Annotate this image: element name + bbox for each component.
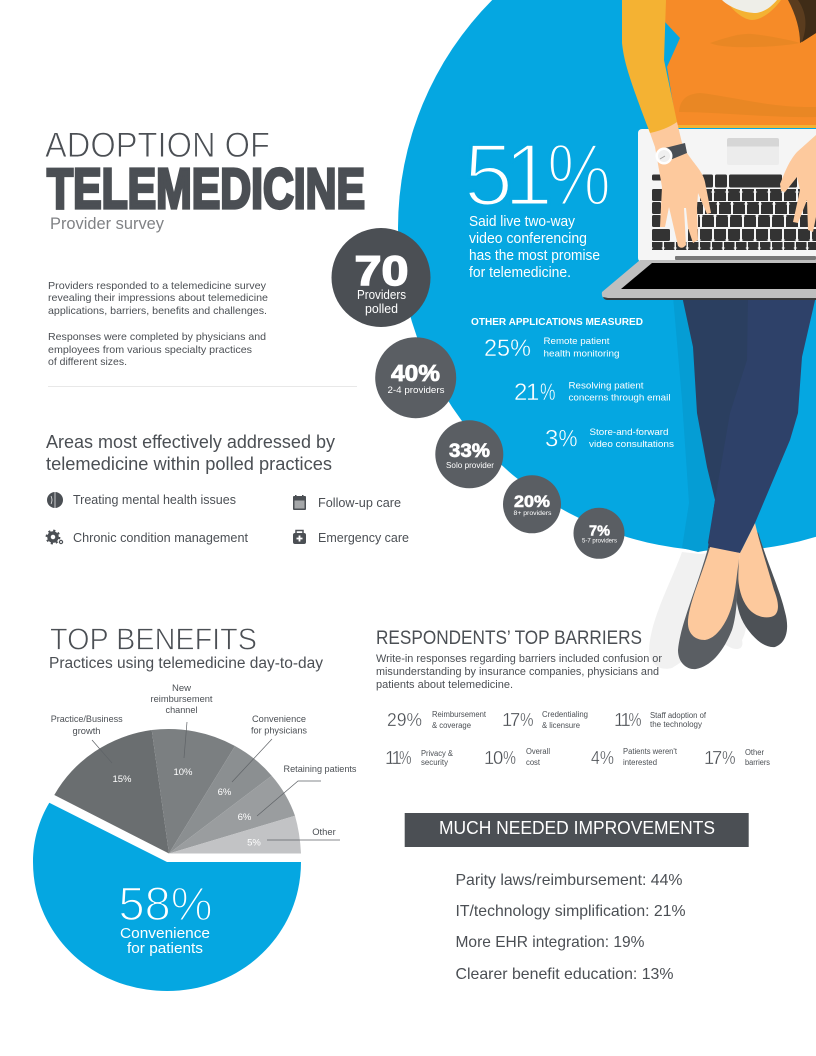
intro text: applications, barriers, benefits and challenges. [48, 305, 267, 317]
stat: 21% email: 21 [514, 379, 539, 406]
bubble: 20%: 20% [514, 493, 550, 511]
slice labels [51, 683, 357, 838]
heading: respondents' top barriers: patients about telemedicine. [376, 679, 513, 691]
slice: retaining patients 6% [169, 776, 295, 854]
right hand [780, 135, 816, 232]
slice labels: New [172, 683, 191, 694]
stat: 10% cost: cost [526, 758, 541, 767]
back foot and shoe [736, 523, 787, 647]
slice values: 15% [112, 774, 132, 785]
blue circle background [398, 0, 816, 551]
other applications measured [471, 317, 674, 452]
icon: brain [47, 492, 63, 508]
stat: 11% staff adoption: the technology [650, 720, 702, 729]
slice labels: reimbursement [150, 694, 213, 705]
stat: 21% email [514, 379, 670, 406]
bubble: 33% [435, 420, 503, 488]
stat: 11% privacy: Privacy & [421, 749, 454, 758]
callout: 51%: % [547, 125, 611, 224]
intro text: Responses were completed by physicians and [48, 331, 266, 343]
stat: 25% remote monitoring: 25% [484, 335, 531, 362]
stat: 21% email: Resolving patient [568, 380, 644, 392]
heading: respondents' top barriers: RESPONDENTS’ TOP BARRIERS [376, 628, 642, 649]
heading: areas addressed: Areas most effectively addressed by [46, 431, 336, 452]
laptop lid [602, 260, 816, 299]
stat: 25% remote monitoring [484, 335, 620, 362]
other applications measured: OTHER APPLICATIONS MEASURED [471, 317, 643, 328]
hair [788, 0, 816, 43]
bubble: 33%: Solo provider [446, 461, 494, 470]
callout: 51%: video conferencing [469, 231, 587, 247]
stat: 10% cost: Overall [526, 747, 550, 756]
bubble: 70 providers polled: polled [365, 302, 398, 316]
item: emergency care: Emergency care [318, 530, 409, 545]
intro text: of different sizes. [48, 356, 127, 368]
stat: 29% reimbursement [387, 709, 487, 730]
bubble: 40%: 40% [391, 360, 440, 386]
slice: practice growth 15% [54, 730, 169, 854]
back leg [682, 296, 760, 553]
stat: 17% other: % [722, 747, 736, 768]
barrier stats [385, 709, 770, 768]
stat: 11% staff adoption: 11 [614, 709, 631, 730]
improvements list: More EHR integration: 19% [456, 934, 644, 951]
banner: much needed improvements [405, 813, 749, 847]
slice values: 6% [238, 812, 252, 823]
slice labels: growth [72, 726, 100, 737]
heading: respondents' top barriers: Write-in responses regarding barriers included confusion or [376, 653, 662, 665]
heading: areas addressed: telemedicine within polled practices [46, 453, 332, 474]
sleeve [622, 0, 677, 133]
callout: 51%: Said live two-way [469, 214, 576, 230]
bubble: 20%: 8+ providers [514, 510, 552, 517]
stat: 3% store-and-forward: 3 [545, 426, 558, 452]
intro text: employees from various specialty practices [48, 344, 252, 356]
sweater folds [679, 34, 816, 117]
item: mental health: Treating mental health issues [73, 492, 236, 507]
heading: top benefits: TOP BENEFITS [50, 622, 257, 656]
hinge [675, 256, 816, 260]
bubble: 70 providers polled: Providers [357, 288, 406, 302]
bubble: 40% [375, 337, 456, 418]
neckline [722, 0, 781, 20]
illustration: woman with laptop [602, 0, 816, 669]
stat: 29% reimbursement: & coverage [432, 721, 472, 730]
stat: 11% privacy: security [421, 758, 448, 767]
bubble: 70 providers polled: 70 [354, 247, 408, 294]
stat: 21% email: concerns through email [568, 392, 670, 404]
callout: 58%: for patients [127, 940, 203, 957]
banner: much needed improvements: MUCH NEEDED IMPROVEMENTS [439, 818, 715, 838]
stat: 3% store-and-forward: % [558, 426, 578, 452]
icon: medical kit [293, 530, 306, 544]
trackpad [727, 138, 779, 165]
icon: gears [46, 530, 63, 544]
slice: convenience physicians 6% [169, 746, 272, 854]
stat: 10% cost: % [503, 747, 516, 768]
stat: 11% privacy: 11 [385, 747, 402, 768]
stat: 11% staff adoption: % [628, 709, 642, 730]
bubble: 7% [574, 508, 624, 559]
stat: 17% credentialing: % [520, 709, 534, 730]
bubble: 7%: 5-7 providers [582, 539, 617, 545]
slice: convenience for patients 58% [33, 803, 301, 991]
figure shadow [649, 296, 746, 669]
slice values: 10% [173, 767, 193, 778]
callout: 58% [118, 877, 212, 957]
stat: 17% other [704, 747, 770, 768]
stat: 17% credentialing: 17 [502, 709, 520, 730]
callout: 58%: 58% [118, 877, 212, 930]
improvements list: Clearer benefit education: 13% [456, 966, 674, 983]
laptop [602, 129, 816, 300]
slice labels: Convenience [252, 714, 306, 725]
stat: 10% cost: 10 [484, 747, 503, 768]
improvements list: Parity laws/reimbursement: 44% [456, 872, 682, 889]
area list [46, 492, 409, 545]
front leg [708, 296, 816, 553]
stat: 29% reimbursement: 29% [387, 709, 422, 730]
front foot and shoe [678, 547, 740, 669]
stat: 17% other: 17 [704, 747, 722, 768]
intro text: Providers responded to a telemedicine survey [48, 280, 267, 292]
stat: 4% not interested: interested [623, 758, 657, 767]
icon: calendar [293, 495, 306, 510]
stat: 17% credentialing: Credentialing [542, 710, 588, 719]
heading: respondents' top barriers: misunderstanding by insurance companies, physicians and [376, 666, 659, 678]
callout: 51%: has the most promise [469, 248, 600, 264]
bubble: 40%: 2-4 providers [388, 385, 445, 396]
slice labels: Retaining patients [284, 764, 357, 775]
slice values: 6% [218, 787, 232, 798]
slice: other 5% [169, 816, 301, 854]
slice values: 5% [247, 838, 261, 848]
item: chronic condition: Chronic condition management [73, 530, 248, 545]
callout: 51%: for telemedicine. [469, 265, 571, 281]
stat: 17% other: barriers [745, 758, 770, 767]
bubble: 20% [503, 475, 561, 533]
stat: 17% other: Other [745, 748, 764, 757]
keyboard [652, 174, 816, 250]
title: TELEMEDICINE [47, 157, 365, 221]
improvements list [456, 872, 686, 983]
slice labels: channel [166, 705, 198, 716]
slice labels: for physicians [251, 726, 307, 736]
screen [621, 263, 816, 289]
stat: 25% remote monitoring: health monitoring [544, 348, 620, 360]
stat: 4% not interested: Patients weren't [623, 747, 678, 756]
bubble: 33%: 33% [449, 441, 490, 462]
stat: 11% privacy: % [399, 747, 412, 768]
slice labels: Practice/Business [51, 714, 123, 725]
callout: 51%: 51 [464, 125, 553, 224]
stat: 3% store-and-forward [545, 426, 674, 452]
sweater torso [665, 0, 816, 128]
stat: 4% not interested [591, 747, 678, 768]
watch [656, 143, 687, 164]
stat: 29% reimbursement: Reimbursement [432, 710, 487, 719]
stat: 17% credentialing [502, 709, 588, 730]
heading: top benefits [49, 622, 323, 672]
title: Provider survey [50, 215, 165, 233]
callout: 58%: Convenience [120, 925, 210, 942]
title: ADOPTION OF [45, 126, 270, 165]
heading: top benefits: Practices using telemedicine day-to-day [49, 655, 323, 672]
intro text: revealing their impressions about telemedicine [48, 292, 268, 304]
stat: 11% staff adoption [614, 709, 707, 730]
intro text [48, 280, 268, 368]
stat: 21% email: % [540, 379, 556, 406]
slice values [112, 767, 261, 848]
item: follow-up care: Follow-up care [318, 495, 401, 510]
callout: 51% [464, 125, 611, 281]
title [45, 126, 365, 233]
slice: new reimbursement 10% [152, 729, 235, 854]
leader lines [92, 722, 340, 840]
stat: 4% not interested: 4% [591, 747, 614, 768]
stat: 17% credentialing: & licensure [542, 721, 581, 730]
stat: 11% staff adoption: Staff adoption of [650, 711, 707, 720]
bubble: 7%: 7% [589, 524, 610, 540]
left hand [650, 122, 711, 248]
improvements list: IT/technology simplification: 21% [456, 903, 686, 920]
bubble: 70 providers polled [332, 228, 430, 327]
stat: 3% store-and-forward: video consultations [589, 439, 674, 450]
heading: respondents' top barriers [376, 628, 662, 691]
stat: 11% privacy [385, 747, 454, 768]
pie chart [33, 683, 357, 991]
stat: 10% cost [484, 747, 550, 768]
stat: 3% store-and-forward: Store-and-forward [590, 427, 668, 438]
stat: 25% remote monitoring: Remote patient [544, 336, 610, 347]
slice labels: Other [312, 827, 336, 838]
heading: areas addressed [46, 431, 336, 474]
